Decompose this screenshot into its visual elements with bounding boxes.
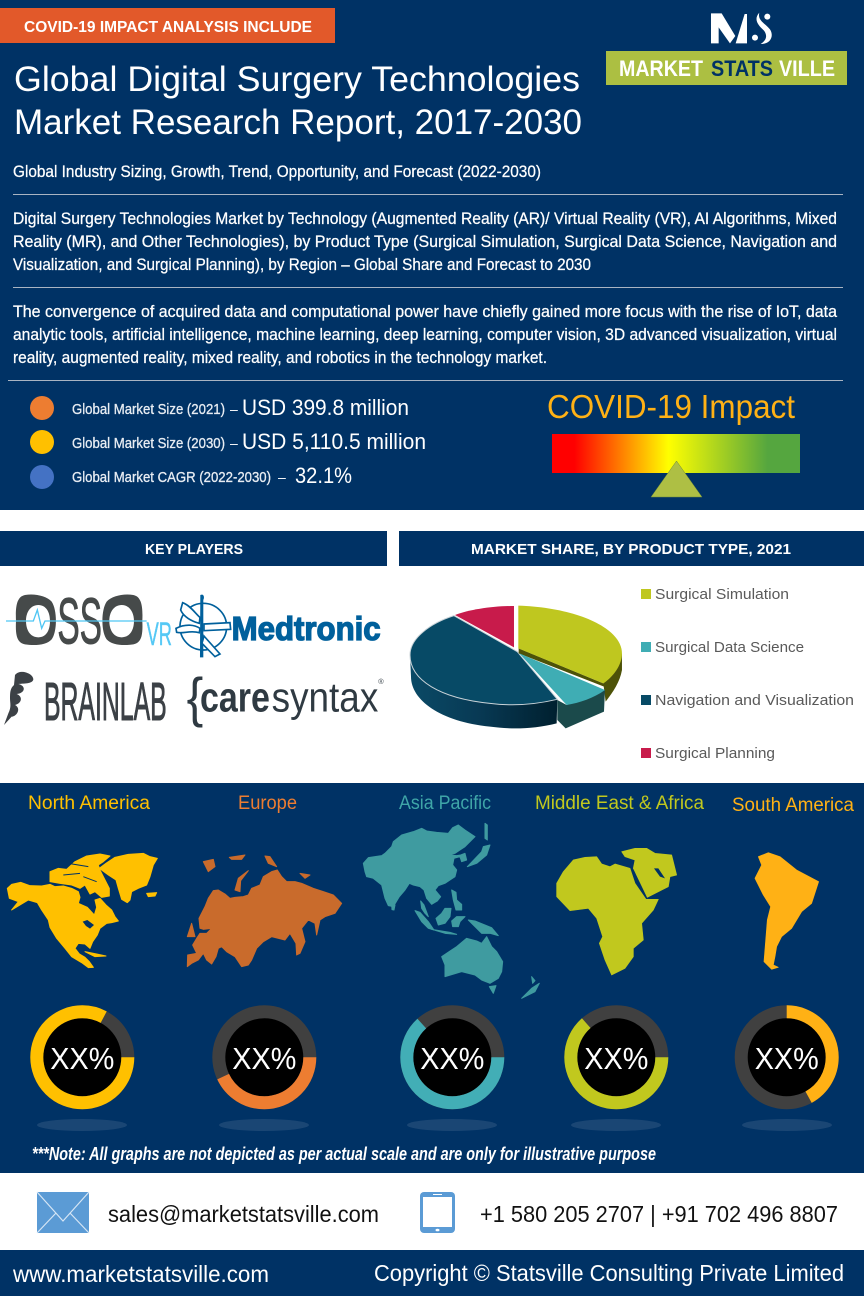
donut: europe: XX%	[232, 1041, 296, 1076]
slice: navigation and visualization	[410, 616, 557, 728]
donut: middle east and africa: XX%	[584, 1041, 648, 1076]
text block: market description: analytic tools, artificial intelligence, machine learning, deep learning, computer vision, 3D advanced visualization, virtual	[13, 326, 837, 344]
covid-19 impact gauge	[547, 388, 800, 497]
metric: market size 2021: –	[230, 401, 238, 417]
icon: envelope	[37, 1192, 89, 1233]
legend: product types	[641, 586, 854, 762]
region headings: Europe	[238, 793, 297, 814]
text block: market description: The convergence of acquired data and computational power have chiefly gained more focus with the rise of IoT, data	[13, 303, 838, 321]
logo: osso vr	[6, 584, 172, 657]
donut: middle east and africa	[571, 1012, 662, 1131]
legend item: surgical planning: Surgical Planning	[655, 745, 775, 762]
logo: caresyntax: ®	[378, 677, 384, 686]
heading: market share	[399, 531, 864, 566]
region headings	[28, 793, 854, 816]
legend item: navigation and visualization: Navigation and Visualization	[655, 692, 854, 709]
donut: asia pacific	[407, 1012, 498, 1131]
panel: contact details	[37, 1192, 838, 1233]
panel: regional breakdown	[0, 783, 864, 1173]
text block: market description	[13, 303, 838, 367]
icon: tablet	[420, 1192, 455, 1233]
logo: brainlab	[4, 672, 167, 732]
donut: north america	[37, 1012, 128, 1131]
map: asia pacific	[363, 823, 539, 998]
logo: market stats ville	[606, 13, 847, 85]
logo: osso vr: VR	[147, 615, 172, 652]
title: Market Research Report, 2017-2030	[14, 103, 582, 142]
logo: caresyntax: care	[200, 674, 270, 721]
text block: market description: reality, augmented reality, mixed reality, and robotics in the technology market.	[13, 349, 547, 367]
phone numbers: +1 580 205 2707 | +91 702 496 8807	[480, 1201, 838, 1227]
metric: cagr	[30, 463, 352, 489]
email: sales@marketstatsville.com	[108, 1201, 379, 1227]
metric: market size 2030: USD 5,110.5 million	[242, 429, 426, 454]
logo: caresyntax: syntax	[272, 674, 378, 721]
donut: europe	[219, 1012, 310, 1131]
logo: market stats ville: MARKET	[619, 56, 703, 81]
text block: report scope	[13, 210, 837, 274]
slice: surgical simulation	[518, 606, 622, 702]
legend item: surgical data science: Surgical Data Science	[655, 639, 804, 656]
logo: caresyntax: {	[187, 666, 203, 728]
donut: south america: XX%	[755, 1041, 819, 1076]
panel: key player logos: BRAINLAB	[44, 673, 167, 732]
logo: caresyntax	[187, 666, 384, 728]
footer: www.marketstatsville.com	[12, 1261, 269, 1287]
title: Global Digital Surgery Technologies	[14, 60, 580, 99]
map: south america	[755, 853, 819, 969]
logo: market stats ville: VILLE	[779, 56, 835, 81]
slice: surgical planning	[455, 606, 514, 647]
logo: osso vr: SS	[57, 584, 102, 657]
region headings: Asia Pacific	[399, 793, 491, 814]
subtitle: Global Industry Sizing, Growth, Trend, Opportunity, and Forecast (2022-2030)	[13, 163, 541, 181]
text block: report scope: Digital Surgery Technologies Market by Technology (Augmented Reality (AR)/ Virtual Reality (VR), AI Algorithms, Mixed	[13, 210, 837, 228]
metric: market size 2021	[30, 395, 409, 420]
market metrics	[30, 395, 426, 489]
donut: asia pacific: XX%	[420, 1041, 484, 1076]
metric: cagr: –	[278, 469, 286, 485]
logo: medtronic: Medtronic	[232, 611, 381, 648]
map: north america	[7, 853, 157, 968]
metric: market size 2030: Global Market Size (2030)	[72, 435, 225, 452]
text block: report scope: Visualization, and Surgical Planning), by Region – Global Share and Forecast to 2030	[13, 256, 591, 274]
donut: north america: XX%	[50, 1041, 114, 1076]
legend item: surgical simulation: Surgical Simulation	[655, 586, 789, 603]
metric: cagr: Global Market CAGR (2022-2030)	[72, 469, 271, 486]
slice: surgical data science	[519, 653, 605, 728]
region headings: South America	[732, 795, 854, 816]
metric: market size 2021: USD 399.8 million	[242, 395, 409, 420]
logo: medtronic	[176, 595, 381, 657]
panel: key player logos	[4, 584, 384, 732]
note: ***Note: All graphs are not depicted as per actual scale and are only for illustrative purpose	[32, 1144, 656, 1164]
title	[14, 60, 582, 142]
region headings: North America	[28, 793, 150, 814]
region headings: Middle East & Africa	[535, 793, 704, 814]
metric: market size 2021: Global Market Size (2021)	[72, 401, 225, 418]
heading: market share: MARKET SHARE, BY PRODUCT TYPE, 2021	[471, 541, 791, 558]
metric: market size 2030	[30, 429, 426, 454]
metric: cagr: 32.1%	[295, 463, 352, 488]
map: middle east and africa	[557, 848, 677, 975]
banner: covid-19 impact analysis: COVID-19 IMPACT ANALYSIS INCLUDE	[24, 19, 312, 36]
heading: key players: KEY PLAYERS	[145, 541, 243, 558]
text block: report scope: Reality (MR), and Other Technologies), by Product Type (Surgical Simulation, Surgical Data Science, Navigation and	[13, 233, 837, 251]
pie chart: market share by product type	[410, 606, 622, 728]
footer: Copyright © Statsville Consulting Private Limited	[374, 1260, 844, 1286]
covid-19 impact gauge: COVID-19 Impact	[547, 388, 795, 425]
donut: south america	[741, 1012, 832, 1131]
metric: market size 2030: –	[230, 435, 238, 451]
banner: covid-19 impact analysis	[0, 8, 335, 43]
heading: key players	[0, 531, 387, 566]
panel: top header	[0, 0, 864, 510]
map: europe	[187, 855, 342, 967]
footer	[0, 1250, 864, 1296]
logo: market stats ville: STATS	[711, 56, 773, 81]
